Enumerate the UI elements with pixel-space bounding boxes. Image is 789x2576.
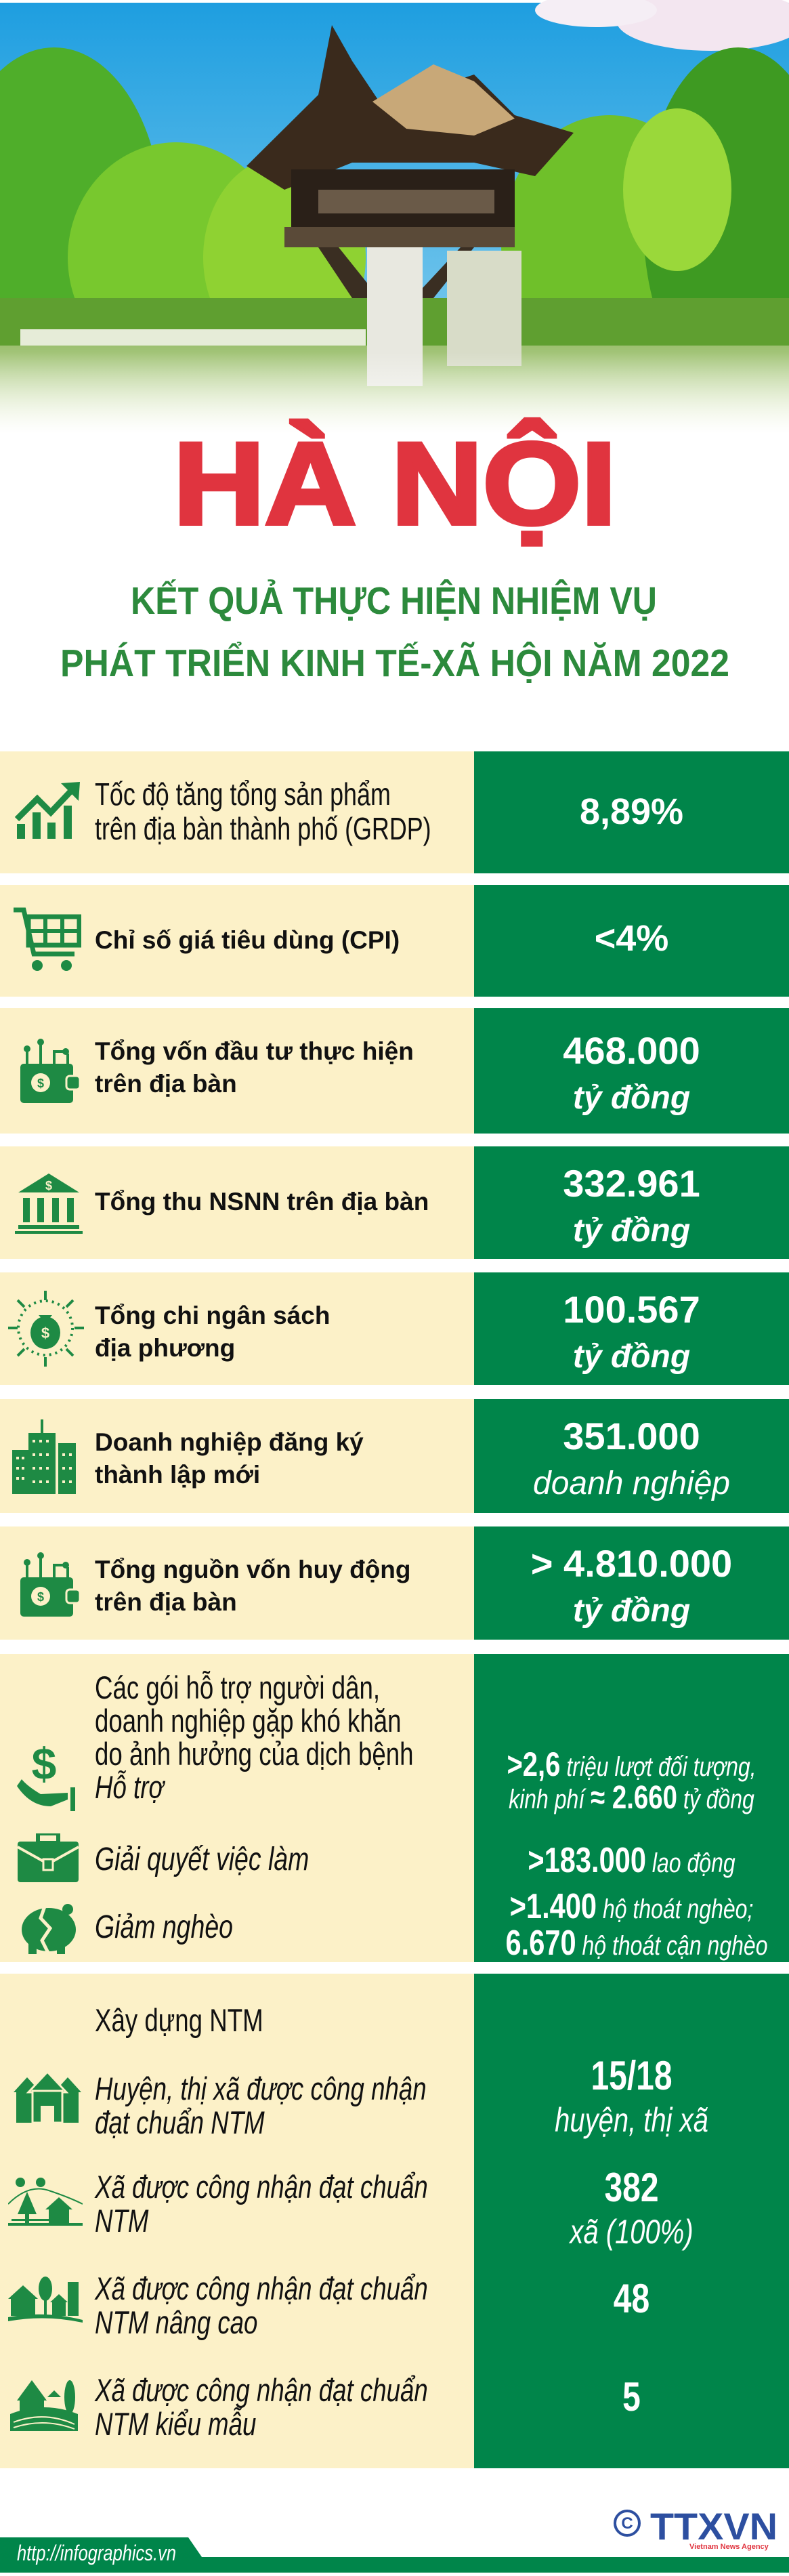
label: trên địa bàn [95, 1070, 237, 1098]
label: communes: NTM [95, 2203, 148, 2239]
label: Doanh nghiệp đăng ký [95, 1428, 364, 1456]
value: support [507, 1745, 756, 1816]
value: > 4.810.000 [531, 1542, 732, 1585]
value: 100.567 [563, 1288, 700, 1331]
icon: wallet [20, 1552, 79, 1617]
icon: buildings [12, 1419, 76, 1494]
label: heading: doanh nghiệp gặp khó khăn [95, 1703, 402, 1739]
logo: TTXVN [610, 2507, 779, 2551]
label [95, 1037, 414, 1098]
value: poverty: >1.400 hộ thoát nghèo; [510, 1887, 753, 1926]
value: poverty [505, 1887, 768, 1963]
value: tỷ đồng [573, 1080, 690, 1116]
value [533, 1415, 730, 1501]
value: tỷ đồng [573, 1339, 690, 1375]
icon: broken piggy [22, 1904, 76, 1954]
label: Tổng chi ngân sách [95, 1302, 330, 1329]
label: jobs: Giải quyết việc làm [95, 1842, 309, 1877]
label: districts: Huyện, thị xã được công nhận [95, 2071, 427, 2106]
row: investment [0, 1008, 789, 1134]
subtitle: KẾT QUẢ THỰC HIỆN NHIỆM VỤ [131, 579, 657, 623]
value: communes: 382 [604, 2165, 659, 2210]
value: 8,89% [580, 791, 683, 832]
label: Tổng vốn đầu tư thực hiện [95, 1037, 414, 1065]
value: districts: 15/18 [591, 2053, 673, 2098]
row: budget revenue [0, 1146, 789, 1259]
label [95, 1556, 410, 1616]
label: thành lập mới [95, 1461, 260, 1489]
label: heading [95, 1669, 414, 1805]
label: địa phương [95, 1334, 235, 1362]
value: jobs: >183.000 lao động [528, 1841, 735, 1880]
label: heading: do ảnh hưởng của dịch bệnh [95, 1736, 414, 1772]
label: Tốc độ tăng tổng sản phẩm [95, 776, 391, 812]
icon: money bag with arrows [8, 1291, 84, 1367]
value: 351.000 [563, 1415, 700, 1457]
label: Tổng nguồn vốn huy động [95, 1556, 410, 1583]
label: heading: Xây dựng NTM [95, 2002, 263, 2038]
value: support: >2,6 triệu lượt đối tượng, [507, 1745, 756, 1783]
footer bar with URL: http://infographics.vn [17, 2541, 176, 2565]
row: GRDP [0, 751, 789, 873]
label [95, 1428, 364, 1489]
icon: wallet: $ [37, 1077, 44, 1090]
label: heading: Hỗ trợ [95, 1769, 164, 1805]
value: tỷ đồng [573, 1593, 690, 1629]
icon: hand with dollar [17, 1739, 75, 1811]
icon: wallet [20, 1039, 79, 1103]
label: communes: Xã được công nhận đạt chuẩn [95, 2169, 428, 2205]
panel: new rural development [0, 1974, 789, 2468]
value: districts [555, 2053, 708, 2139]
label [95, 1302, 330, 1362]
label: model communes [95, 2373, 428, 2441]
value: doanh nghiệp [533, 1466, 730, 1501]
icon: cart [14, 908, 81, 971]
value [563, 1288, 700, 1375]
icon: model village [10, 2373, 78, 2431]
value: support: kinh phí ≈ 2.660 tỷ đồng [509, 1780, 754, 1816]
panel: support packages [0, 1654, 789, 1963]
icon: advanced village [8, 2275, 83, 2326]
label: model communes: NTM kiểu mẫu [95, 2406, 256, 2442]
subtitle [60, 579, 729, 684]
value: tỷ đồng [573, 1213, 690, 1249]
title: HÀ NỘI: HÀ NỘI [173, 419, 616, 549]
value: districts: huyện, thị xã [555, 2101, 708, 2139]
value: communes [505, 2167, 757, 2253]
label: districts [95, 2071, 427, 2140]
header photo: One Pillar Pagoda [0, 0, 789, 423]
icon: growth chart [15, 782, 80, 839]
label: advanced communes [95, 2272, 428, 2340]
icon: money bag with arrows: $ [41, 1325, 49, 1342]
logo: TTXVN: C [621, 2514, 633, 2533]
label: districts: đạt chuẩn NTM [95, 2104, 265, 2140]
label: Tổng thu NSNN trên địa bàn [95, 1188, 429, 1216]
icon: village scene [8, 2178, 83, 2226]
icon: bank [15, 1173, 83, 1234]
footer bar with URL [0, 2537, 789, 2573]
row: CPI [0, 885, 789, 997]
label: model communes: Xã được công nhận đạt chuẩn [95, 2372, 428, 2408]
value: <4% [595, 918, 668, 959]
label: Chỉ số giá tiêu dùng (CPI) [95, 926, 400, 954]
row: budget spending [0, 1272, 789, 1385]
value: model communes: 5 [622, 2374, 641, 2419]
value [563, 1162, 700, 1249]
icon: bank: $ [45, 1179, 52, 1192]
icon: houses [14, 2073, 81, 2123]
value: advanced communes: 48 [614, 2276, 649, 2321]
label: trên địa bàn [95, 1588, 237, 1616]
value: communes: xã (100%) [570, 2213, 694, 2251]
logo: TTXVN: Vietnam News Agency [689, 2543, 769, 2551]
value: 468.000 [563, 1029, 700, 1072]
label [95, 776, 431, 846]
row: mobilized capital [0, 1526, 789, 1640]
value [563, 1029, 700, 1116]
label: poverty: Giảm nghèo [95, 1909, 233, 1945]
icon: hand with dollar: $ [32, 1739, 56, 1789]
value: 332.961 [563, 1162, 700, 1205]
label: heading: Các gói hỗ trợ người dân, [95, 1669, 380, 1705]
icon: wallet: $ [37, 1590, 44, 1604]
icon: briefcase [18, 1833, 79, 1882]
value: poverty: 6.670 hộ thoát cận nghèo [505, 1924, 768, 1963]
label: communes [95, 2170, 428, 2238]
row: new enterprises [0, 1399, 789, 1513]
label: advanced communes: Xã được công nhận đạt chuẩn [95, 2270, 428, 2306]
value [531, 1542, 732, 1629]
label: trên địa bàn thành phố (GRDP) [95, 811, 431, 846]
label: advanced communes: NTM nâng cao [95, 2304, 257, 2340]
